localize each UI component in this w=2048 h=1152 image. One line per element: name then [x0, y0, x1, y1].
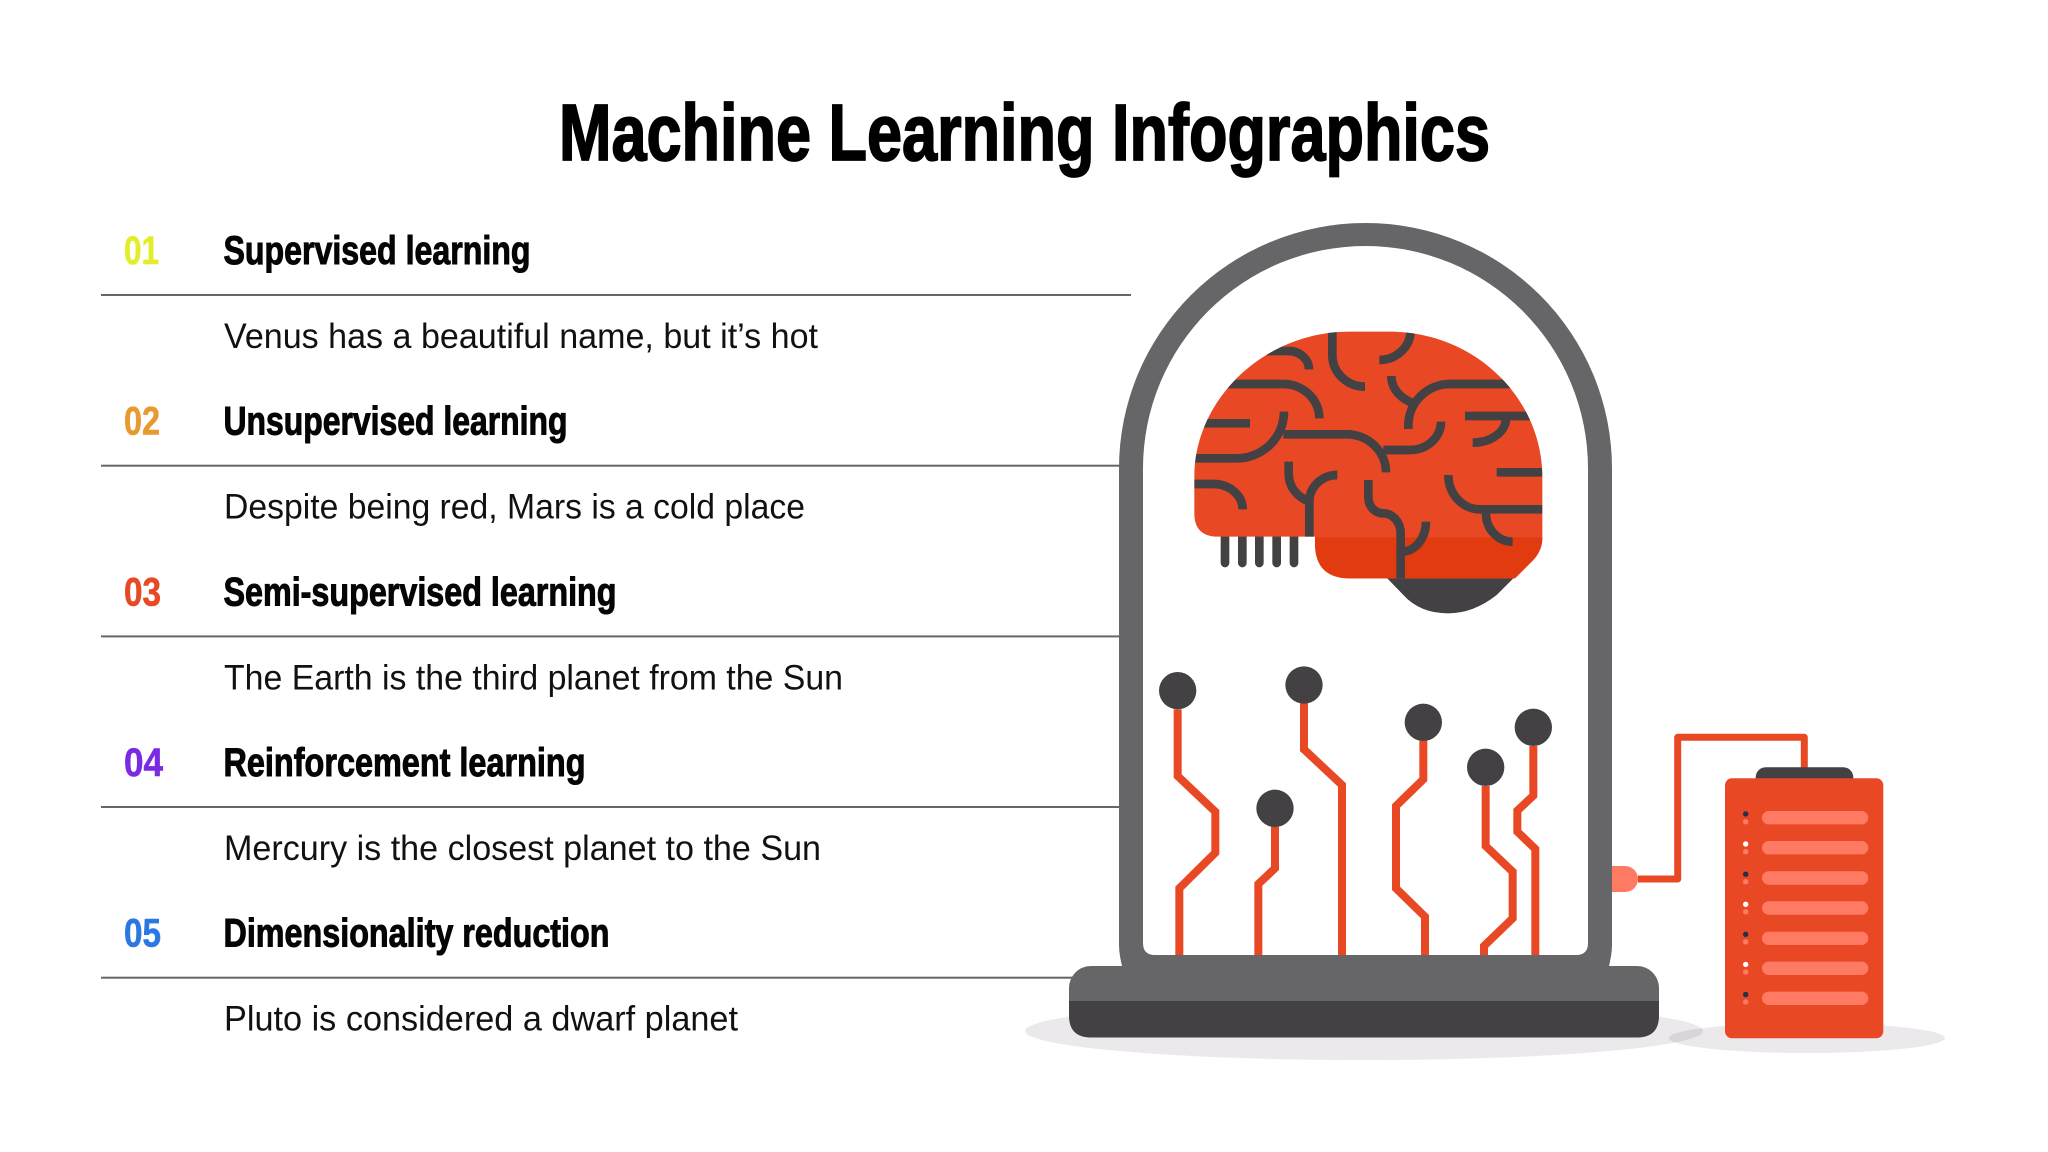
server body: [1725, 778, 1883, 1038]
server status dots: [1743, 811, 1748, 1005]
description 01: Venus has a beautiful name, but it’s hot: [224, 317, 818, 356]
server battery: [1725, 767, 1883, 1038]
heading 04: Reinforcement learning: [224, 741, 586, 785]
number 02: 02: [124, 400, 160, 444]
floor shadows: [1025, 1002, 1945, 1060]
description 03: The Earth is the third planet from the Sun: [224, 658, 843, 697]
number 01: 01: [124, 229, 159, 273]
list item 04: [101, 741, 1131, 868]
base: [1069, 966, 1659, 1038]
divider 04: [101, 806, 1131, 808]
brain body: [1194, 332, 1542, 578]
brain folds: [1192, 330, 1545, 580]
heading 03: Semi-supervised learning: [224, 570, 616, 614]
description 05: Pluto is considered a dwarf planet: [224, 1000, 738, 1039]
number 04: 04: [124, 741, 164, 785]
brain connector pins: [1221, 535, 1298, 567]
server bars: [1762, 811, 1868, 1005]
server cap: [1756, 767, 1853, 780]
icon: brain: [1192, 330, 1545, 613]
divider 02: [101, 465, 1131, 467]
brain lower shade: [1315, 537, 1542, 578]
number 03: 03: [124, 570, 161, 614]
divider 01: [101, 294, 1131, 296]
divider 05: [101, 977, 1131, 979]
nodes: [1159, 666, 1552, 827]
heading 01: Supervised learning: [224, 229, 530, 273]
list item 02: [101, 400, 1131, 527]
divider 03: [101, 635, 1131, 637]
list item 01: [101, 229, 1131, 356]
number 05: 05: [124, 912, 161, 956]
title: Machine Learning Infographics: [559, 88, 1490, 177]
list item 05: [101, 912, 1131, 1039]
circuit traces with nodes: [1159, 666, 1552, 955]
traces: [1178, 703, 1535, 955]
description 04: Mercury is the closest planet to the Sun: [224, 829, 821, 868]
brain stem: [1387, 578, 1513, 613]
heading 02: Unsupervised learning: [224, 400, 568, 444]
heading 05: Dimensionality reduction: [224, 912, 610, 956]
description 02: Despite being red, Mars is a cold place: [224, 488, 805, 527]
glass bell dome: [1119, 223, 1612, 970]
list item 03: [101, 570, 1131, 697]
cable and plug: [1612, 737, 1804, 892]
